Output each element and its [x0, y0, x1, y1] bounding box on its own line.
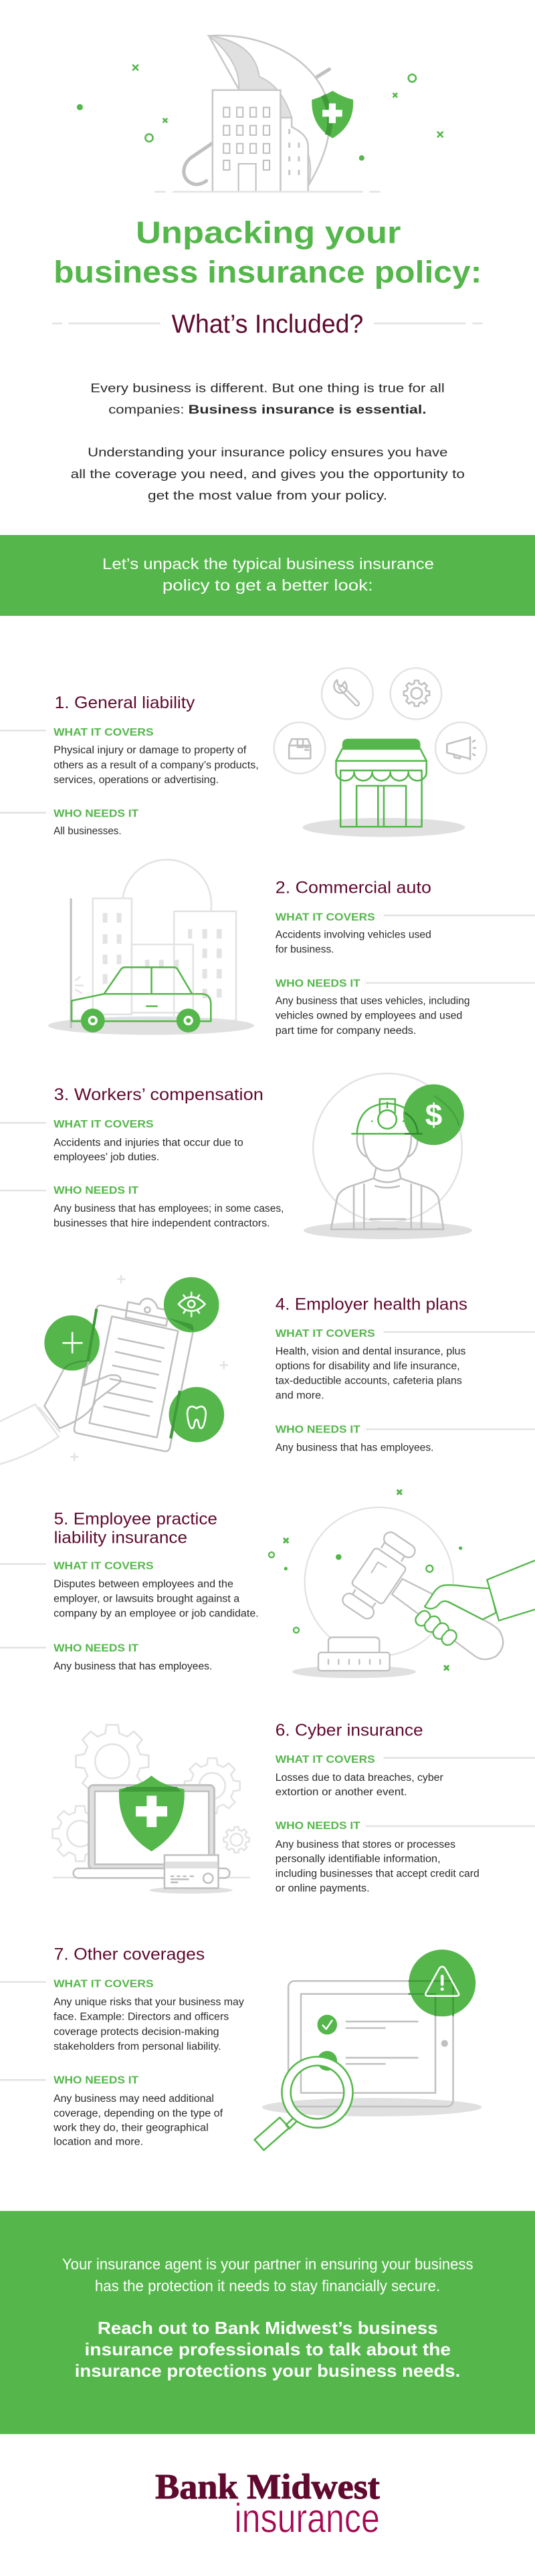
- what it covers: WHAT IT COVERS: [54, 727, 154, 738]
- what it covers: company by an employee or job candidate.: [54, 1608, 259, 1619]
- who needs it: part time for company needs.: [276, 1025, 416, 1037]
- illustration: laptop with shield, gears and card: [53, 1725, 249, 1894]
- hero illustration: building under umbrella with shield: [155, 35, 380, 192]
- what it covers: Losses due to data breaches, cyber: [276, 1772, 443, 1784]
- what it covers: WHAT IT COVERS: [276, 1328, 375, 1339]
- intro paragraphs: Every business is different. But one thing is true for all: [90, 381, 445, 395]
- title: Unpacking your: [136, 215, 401, 249]
- logo: Bank Midwest insurance: insurance: [235, 2496, 380, 2541]
- who needs it: location and more.: [54, 2137, 143, 2148]
- panel: 6 cyber insurance: [53, 1721, 535, 1895]
- intro paragraphs: Business insurance is essential.: [189, 402, 427, 416]
- what it covers: Accidents involving vehicles used: [276, 930, 431, 941]
- who needs it: All businesses.: [54, 825, 122, 837]
- panel: 4 employer health plans: [0, 1276, 535, 1464]
- title: [54, 215, 481, 289]
- icon: package: [274, 722, 325, 774]
- who needs it: WHO NEEDS IT: [54, 1642, 139, 1654]
- icon: wrench: [322, 668, 373, 720]
- who needs it: work they do, their geographical: [53, 2123, 209, 2134]
- intro paragraphs: get the most value from your policy.: [148, 488, 387, 502]
- who needs it: WHO NEEDS IT: [276, 978, 361, 990]
- who needs it: coverage, depending on the type of: [54, 2108, 223, 2119]
- who needs it: [54, 808, 139, 837]
- who needs it: Any business that has employees.: [54, 1660, 212, 1672]
- who needs it: WHO NEEDS IT: [276, 1820, 361, 1832]
- who needs it: Any business may need additional: [54, 2093, 214, 2105]
- intro paragraphs: all the coverage you need, and gives you the opportunity to: [71, 467, 465, 481]
- what it covers: WHAT IT COVERS: [276, 1754, 375, 1765]
- who needs it: including businesses that accept credit card: [276, 1868, 479, 1880]
- what it covers: Any unique risks that your business may: [54, 1996, 244, 2008]
- closing green banner: Your insurance agent is your partner in ensuring your business: [62, 2255, 473, 2272]
- closing green banner: [0, 2211, 535, 2434]
- who needs it: [276, 1424, 433, 1453]
- closing green banner: insurance protections your business needs.: [75, 2362, 460, 2381]
- who needs it: WHO NEEDS IT: [276, 1424, 361, 1435]
- closing green banner: Reach out to Bank Midwest’s business: [98, 2319, 438, 2338]
- logo: Bank Midwest insurance: Bank Midwest: [155, 2468, 380, 2506]
- what it covers: options for disability and life insurance,: [276, 1360, 460, 1372]
- what it covers: [276, 1754, 443, 1798]
- illustration: gavel in hand: [269, 1490, 535, 1678]
- what it covers: coverage protects decision-making: [54, 2026, 219, 2038]
- who needs it: vehicles owned by employees and used: [276, 1010, 462, 1021]
- what it covers: WHAT IT COVERS: [54, 1978, 154, 1990]
- illustration: storefront: [303, 739, 465, 837]
- what it covers: [54, 1119, 243, 1163]
- heading: 5. Employee practice: [54, 1510, 217, 1529]
- intro paragraphs: [71, 381, 465, 502]
- what it covers: Physical injury or damage to property of: [54, 745, 247, 756]
- decorative green marks around hero: [77, 65, 443, 160]
- intro paragraphs: Understanding your insurance policy ensures you have: [88, 445, 447, 459]
- who needs it: personally identifiable information,: [276, 1854, 441, 1865]
- what it covers: WHAT IT COVERS: [54, 1119, 154, 1130]
- what it covers: [276, 912, 431, 955]
- heading: [54, 1510, 217, 1547]
- illustration: tablet checklist with magnifier and warning: [255, 1949, 481, 2150]
- green banner: Let’s unpack the typical business insurance: [102, 555, 434, 572]
- who needs it: WHO NEEDS IT: [54, 1185, 139, 1196]
- what it covers: Disputes between employees and the: [54, 1578, 233, 1590]
- logo: Bank Midwest insurance: [155, 2468, 380, 2541]
- heading: liability insurance: [54, 1529, 187, 1547]
- green banner: policy to get a better look:: [163, 576, 373, 594]
- who needs it: Any business that has employees; in some cases,: [54, 1203, 284, 1214]
- who needs it: [54, 1185, 284, 1229]
- what it covers: face. Example: Directors and officers: [54, 2011, 229, 2022]
- who needs it: [54, 1642, 212, 1672]
- who needs it: WHO NEEDS IT: [54, 2074, 139, 2086]
- who needs it: Any business that uses vehicles, including: [276, 996, 470, 1007]
- heading: 6. Cyber insurance: [276, 1721, 423, 1739]
- who needs it: WHO NEEDS IT: [54, 808, 139, 819]
- panel: 2 commercial auto: [48, 859, 535, 1037]
- who needs it: or online payments.: [276, 1883, 370, 1895]
- what it covers: WHAT IT COVERS: [276, 912, 375, 924]
- heading: 4. Employer health plans: [276, 1295, 467, 1314]
- what it covers: Accidents and injuries that occur due to: [54, 1137, 243, 1148]
- who needs it: [53, 2074, 223, 2148]
- closing green banner: insurance professionals to talk about the: [85, 2341, 451, 2359]
- heading: 7. Other coverages: [54, 1945, 205, 1964]
- panel: 5 employee practice liability insurance: [0, 1490, 535, 1678]
- green banner: [0, 535, 535, 616]
- who needs it: Any business that stores or processes: [276, 1839, 455, 1850]
- who needs it: businesses that hire independent contractors.: [54, 1218, 270, 1229]
- illustration: clipboard, hand and health icons: [0, 1276, 227, 1464]
- heading: 2. Commercial auto: [276, 879, 431, 897]
- what it covers: services, operations or advertising.: [54, 774, 219, 786]
- what it covers: extortion or another event.: [276, 1787, 407, 1798]
- what it covers: others as a result of a company’s products,: [54, 760, 259, 771]
- heading: 1. General liability: [55, 693, 195, 712]
- closing green banner: has the protection it needs to stay financially secure.: [95, 2277, 440, 2294]
- what it covers: [276, 1328, 466, 1401]
- panel: 7 other coverages: [0, 1945, 481, 2150]
- icon: gear: [391, 668, 441, 720]
- subtitle with side rules: What’s Included?: [172, 310, 363, 338]
- title: business insurance policy:: [54, 254, 481, 289]
- what it covers: WHAT IT COVERS: [54, 1560, 154, 1572]
- what it covers: [54, 1560, 259, 1619]
- illustration: miner worker with dollar circle: $: [425, 1097, 442, 1132]
- what it covers: [54, 1978, 244, 2052]
- what it covers: tax-deductible accounts, cafeteria plans: [276, 1375, 462, 1386]
- what it covers: [54, 727, 259, 786]
- what it covers: employees’ job duties.: [54, 1152, 159, 1163]
- icon: megaphone: [435, 722, 487, 774]
- who needs it: [276, 1820, 479, 1895]
- what it covers: Health, vision and dental insurance, plus: [276, 1346, 466, 1358]
- what it covers: employer, or lawsuits brought against a: [54, 1593, 240, 1604]
- illustration: car in city: [48, 859, 254, 1035]
- who needs it: [276, 978, 470, 1037]
- what it covers: for business.: [276, 944, 334, 955]
- intro paragraphs: companies:: [108, 402, 185, 416]
- what it covers: and more.: [276, 1390, 324, 1401]
- what it covers: stakeholders from personal liability.: [54, 2041, 221, 2052]
- who needs it: Any business that has employees.: [276, 1442, 433, 1453]
- panel: 3 workers compensation: [0, 1073, 472, 1239]
- heading: 3. Workers’ compensation: [54, 1085, 263, 1104]
- illustration: miner worker with dollar circle: [304, 1073, 472, 1239]
- panel: 1 general liability: [0, 668, 487, 837]
